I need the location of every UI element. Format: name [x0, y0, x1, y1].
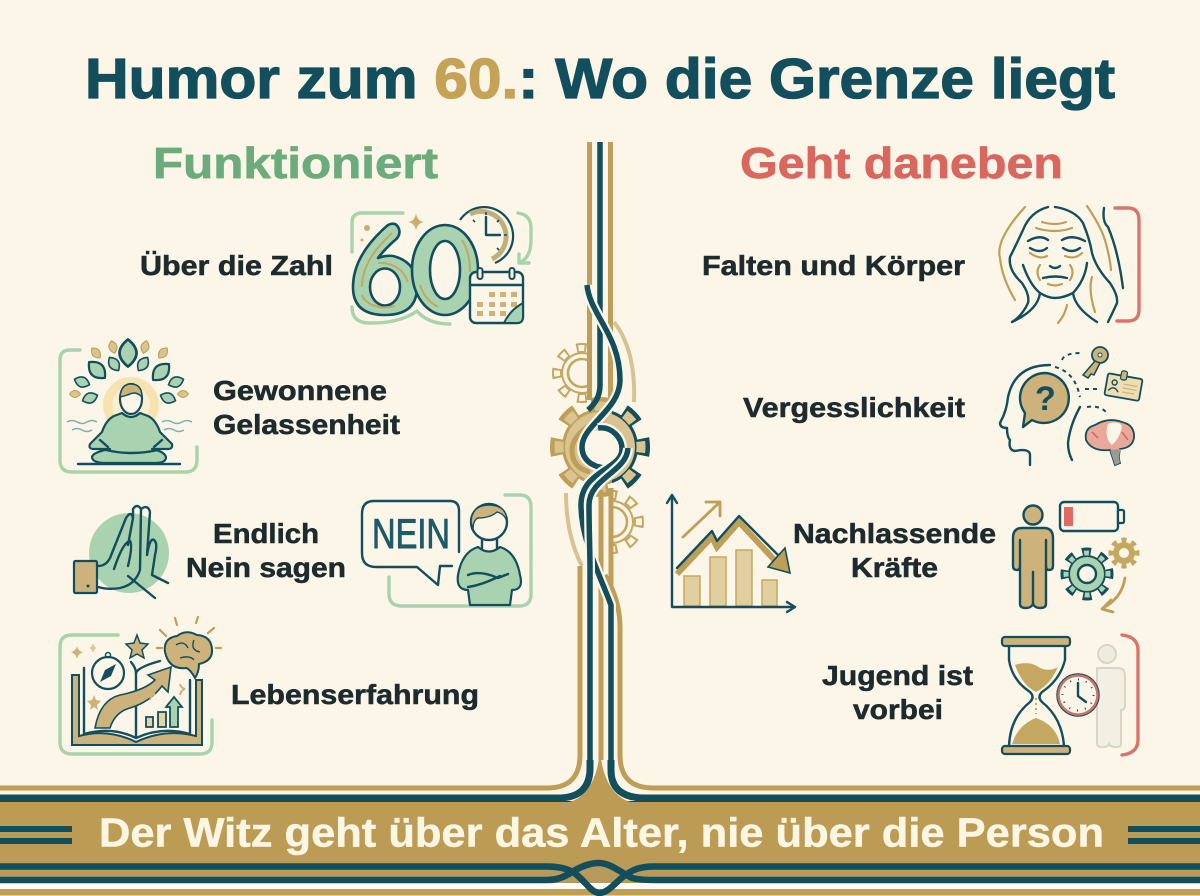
label: Endlich Nein sagen: Nein sagen: [186, 552, 346, 583]
panel: Geht daneben: [667, 139, 1144, 755]
icon: raised hands: [74, 506, 169, 598]
label: Gewonnene Gelassenheit: Gelassenheit: [213, 409, 400, 440]
label: Falten und Körper: Falten und Körper: [702, 250, 965, 281]
label: Nachlassende Kräfte: [793, 518, 996, 583]
label: Gewonnene Gelassenheit: [213, 375, 400, 440]
icon: wrinkled face: [999, 206, 1139, 323]
icon: person, low battery and gears: [1013, 502, 1137, 612]
label: Nachlassende Kräfte: Kräfte: [851, 552, 938, 583]
bottom connected lines: [0, 566, 580, 788]
gear: lower right small: [614, 490, 644, 554]
icon: NEIN speech bubble and person: [362, 495, 531, 606]
label: Über die Zahl: Über die Zahl: [140, 250, 333, 281]
title: Humor zum 60.: Wo die Grenze liegt: [85, 47, 1115, 111]
label: Vergesslichkeit: Vergesslichkeit: [743, 392, 965, 423]
icon: NEIN speech bubble and person: NEIN: [372, 510, 450, 557]
icon: meditating person with leaves: [60, 339, 197, 472]
label: Lebenserfahrung: Lebenserfahrung: [231, 679, 479, 710]
label: Jugend ist vorbei: [822, 660, 973, 725]
icon: head with question mark, key, ID card and brain: [1000, 347, 1144, 465]
icon: 60 with clock and calendar: [352, 207, 531, 324]
icon: book, compass, arrow and brain: [60, 617, 221, 754]
banner text: Der Witz geht über das Alter, nie über die Person: [99, 810, 1104, 856]
vertical lines: [587, 142, 592, 400]
label: Gewonnene Gelassenheit: Gewonnene: [213, 375, 387, 406]
label: Endlich Nein sagen: Endlich: [213, 518, 319, 549]
label: Jugend ist vorbei: Jugend ist: [822, 660, 973, 691]
panel: Funktioniert: [60, 139, 531, 754]
bottom banner: [0, 742, 1200, 896]
icon: declining chart: [667, 495, 795, 612]
banner side accents: [0, 829, 1200, 841]
icon: head with question mark, key, ID card and brain: ?: [1035, 380, 1056, 418]
gear: central large: [557, 404, 643, 490]
gear: upper left small: [552, 343, 587, 403]
label: Jugend ist vorbei: vorbei: [853, 694, 943, 725]
heading: Geht daneben: Geht daneben: [740, 139, 1063, 188]
woven teal strands: [582, 285, 620, 468]
central divider with knot and gears: [0, 142, 1200, 798]
label: Endlich Nein sagen: [186, 518, 346, 583]
label: Nachlassende Kräfte: Nachlassende: [793, 518, 996, 549]
icon: hourglass, clock and fading person: [1002, 635, 1138, 755]
heading: Funktioniert: Funktioniert: [153, 139, 438, 188]
